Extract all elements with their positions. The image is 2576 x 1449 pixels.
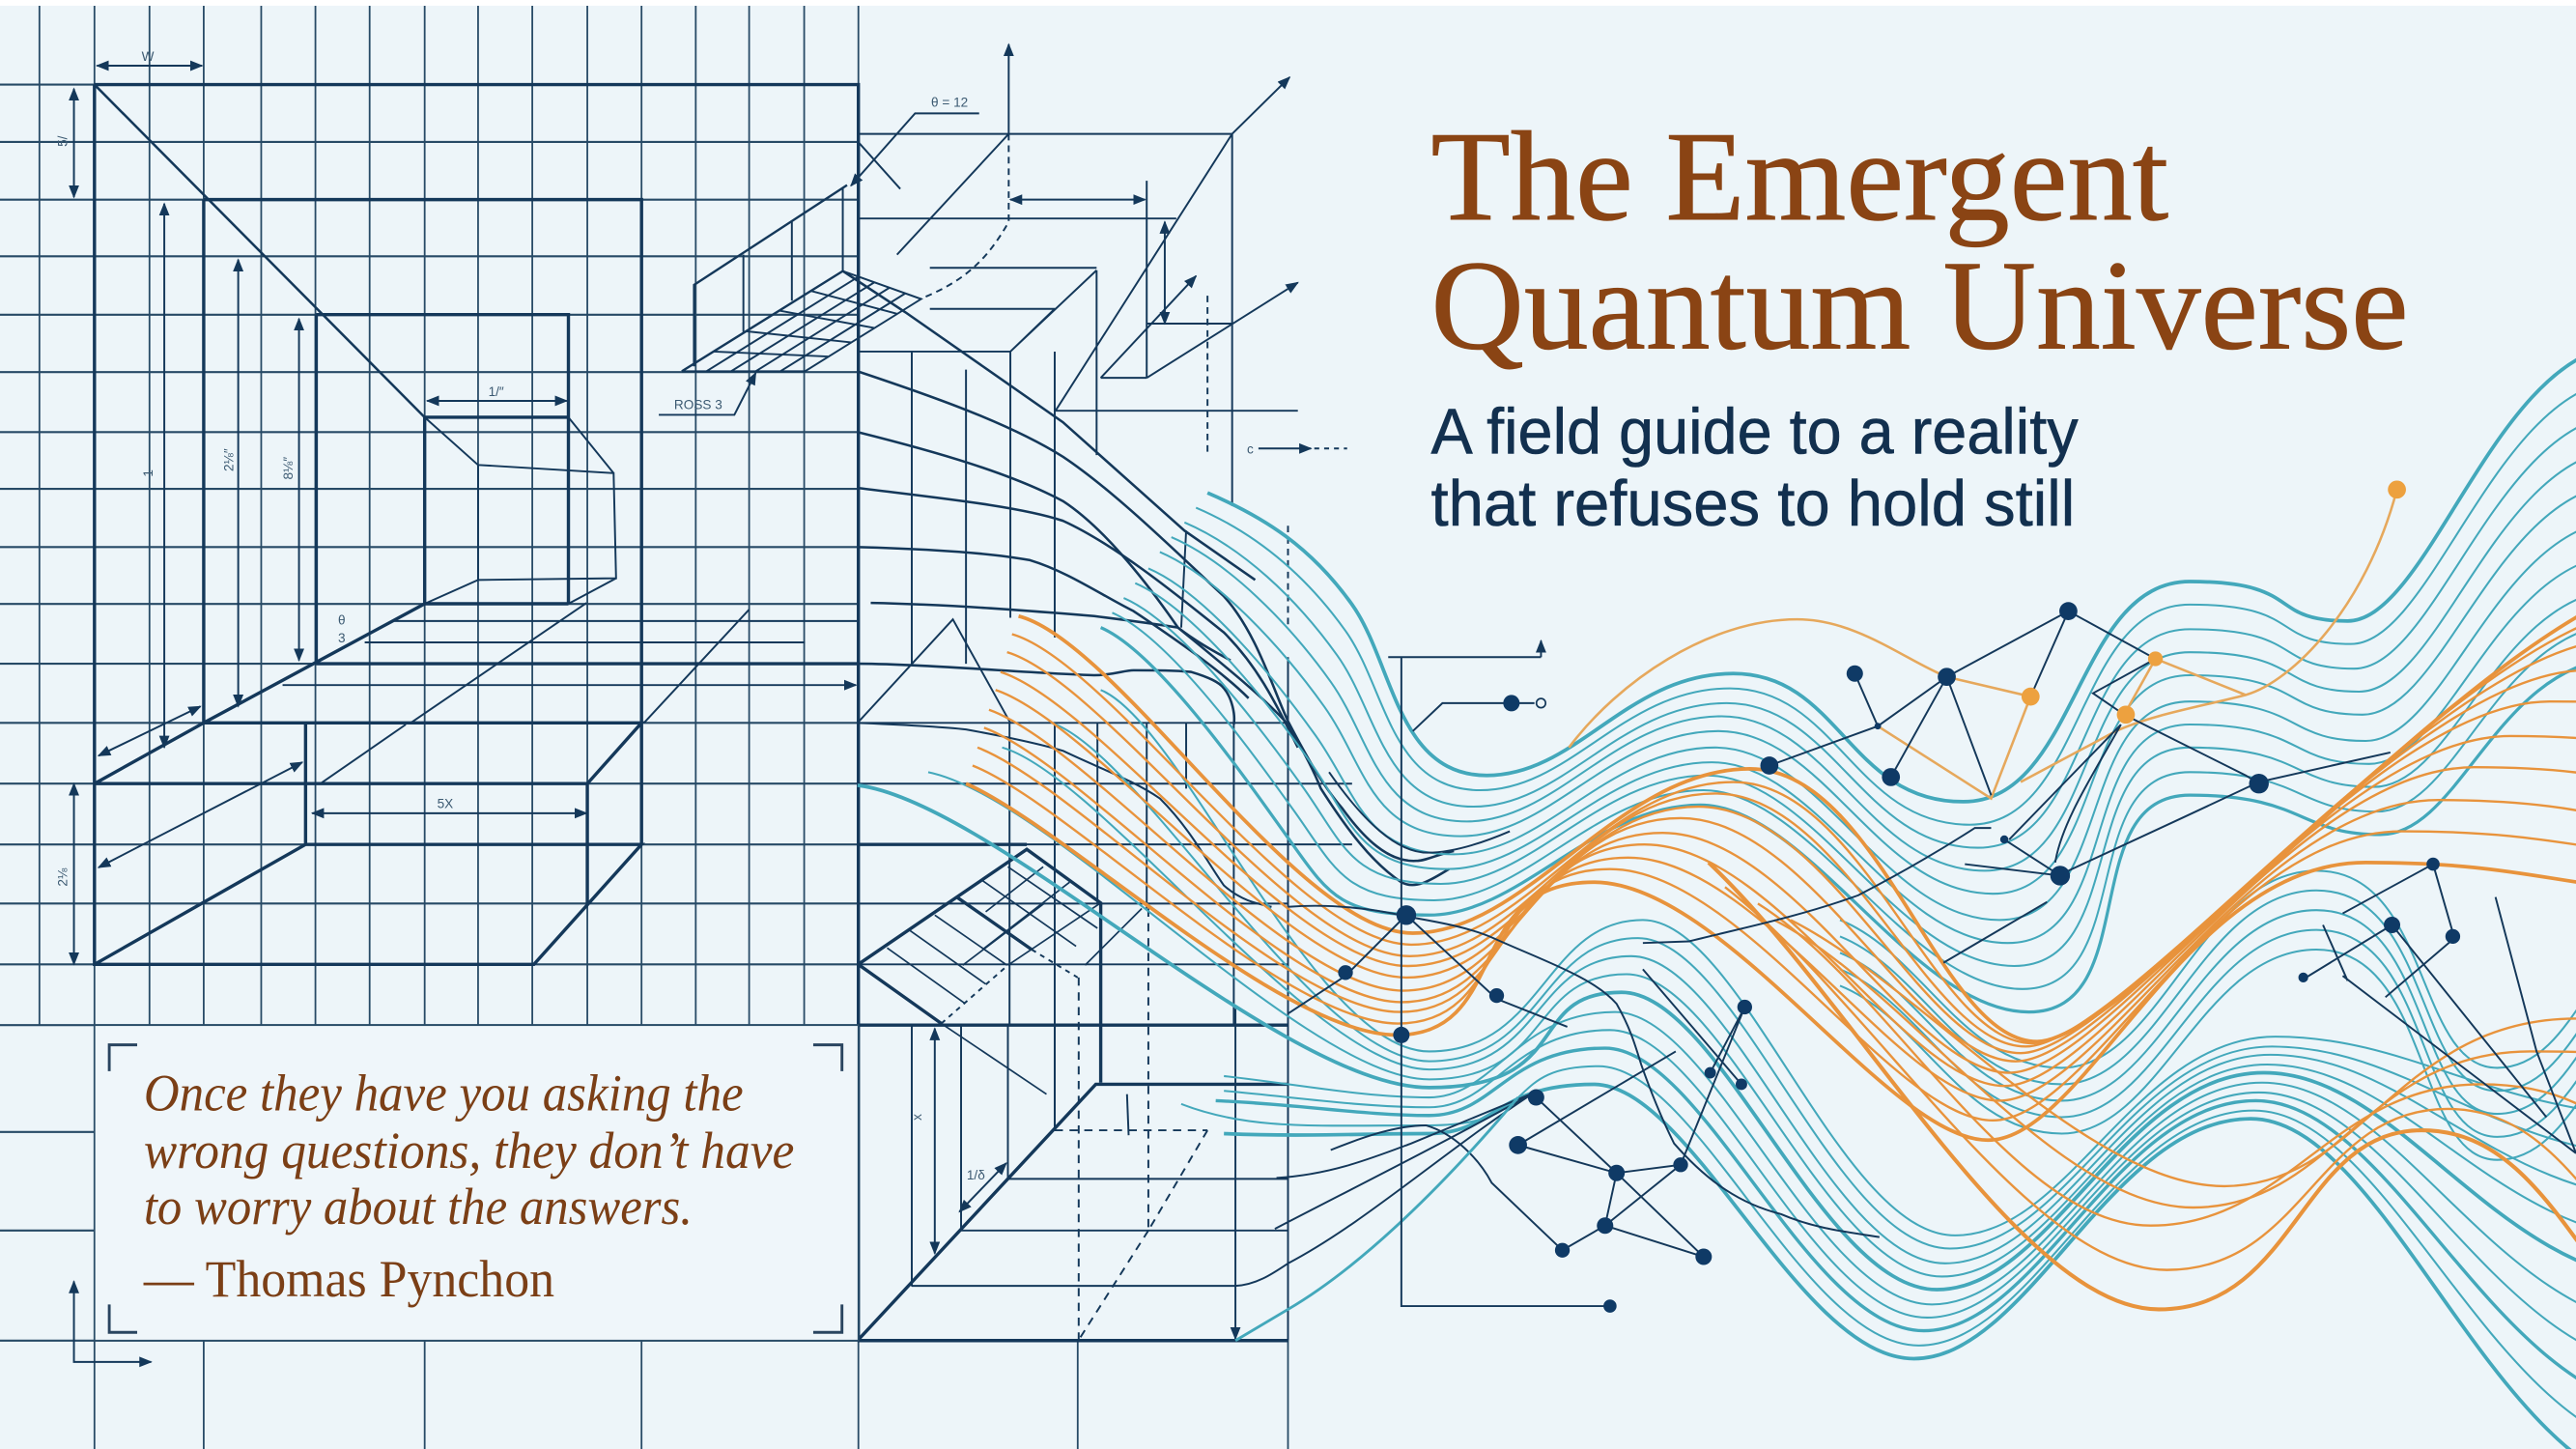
quote text: Once they have you asking the [144,1065,744,1122]
corner brackets [109,1045,842,1332]
fan of converging blueprint curves [843,271,1454,907]
wave family: teal upper band [1101,345,2576,1012]
title: Quantum Universe [1430,235,2409,377]
wave family: teal right band [1840,870,2576,1160]
dimension arrows and labels: 1/″ [489,384,504,399]
subtitle [1430,396,2079,540]
wave family: orange lower band [1709,863,2576,1380]
lower perspective drawing: 1/δ [967,1168,985,1182]
dimension arrows and labels: 5X [438,797,453,811]
wave family: orange main band [966,575,2576,1140]
title: The Emergent [1430,105,2168,247]
dimension arrows and labels: 2⅛″ [222,448,237,471]
network nodes navy [1338,602,2460,1265]
dimension arrows and labels: 8⅛″ [281,457,296,480]
lower perspective drawing [858,908,1288,1341]
quote attribution: — Thomas Pynchon [143,1250,554,1308]
network nodes orange [2022,480,2406,724]
blueprint grid [0,6,1288,1449]
subtitle: A field guide to a reality [1430,396,2079,468]
perspective mesh upper [682,185,921,371]
title [1430,105,2409,377]
left nested box drawing [95,85,859,1341]
dimension arrows and labels: 5/ [56,135,71,147]
right perspective drawing: c [1247,441,1254,456]
network connections [1235,611,2576,1341]
subtitle: that refuses to hold still [1430,469,2075,540]
wave family: teal lower band [858,690,2576,1449]
dimension arrows and labels [56,49,586,964]
dimension arrows and labels: W [142,49,155,64]
dimension arrows and labels: θ [338,612,346,627]
panel: quote [95,1025,859,1341]
quote text: wrong questions, they don’t have [144,1122,794,1179]
lower perspective drawing: x [910,1114,924,1121]
quote text: to worry about the answers. [144,1178,693,1236]
dimension arrows and labels: 1 [141,469,156,477]
dimension arrows and labels: 3 [338,631,346,645]
bracket with terminal nodes [1388,640,1617,1313]
right perspective drawing [659,44,1352,1341]
lower mesh diamond [858,844,1288,1341]
thin orange connector curves [1569,490,2397,799]
dimension arrows and labels: 2⅛ [56,867,71,887]
right perspective drawing: ROSS 3 [674,397,722,412]
quote text [144,1065,794,1236]
right perspective drawing: θ = 12 [931,96,968,110]
axis arrows [74,1282,151,1362]
